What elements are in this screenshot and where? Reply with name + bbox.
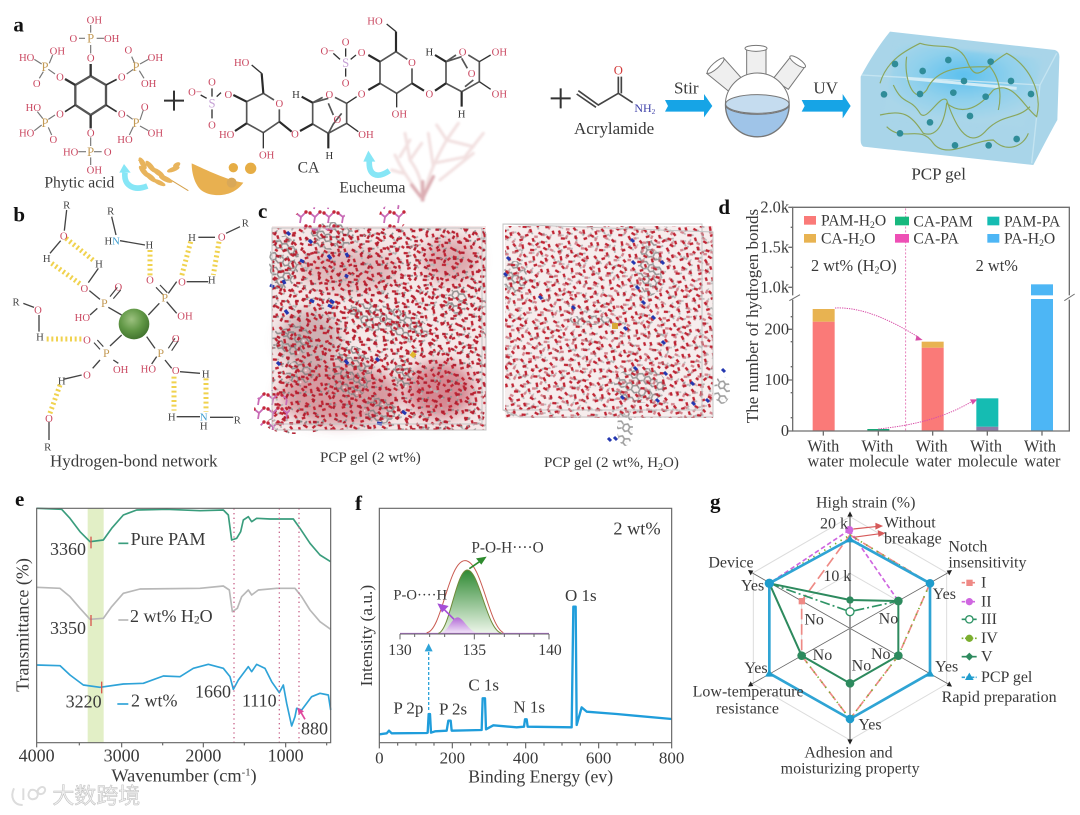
carrageenan (CA) structure: O — [342, 37, 350, 48]
carrageenan (CA) structure: O — [358, 90, 366, 101]
peak labels: 880 — [301, 718, 328, 738]
panel b: hydrogen-bond network — [12, 200, 250, 471]
arrow: molecule bonds increase — [878, 399, 977, 429]
axis arrowheads — [748, 511, 952, 745]
carrageenan (CA) structure: H — [425, 48, 433, 59]
caption: Hydrogen-bond network: Hydrogen-bond network — [50, 452, 218, 471]
atom labels: O — [45, 414, 53, 425]
peak labels — [393, 586, 597, 718]
axis labels and values: breakage — [884, 530, 942, 547]
series II — [769, 526, 898, 601]
axis labels and values — [693, 494, 1057, 777]
spectrum: Pure PAM — [37, 508, 331, 562]
legend: IV — [981, 630, 998, 647]
label: Stir: Stir — [674, 78, 699, 97]
carrageenan (CA) structure: H — [292, 90, 300, 101]
series label: 2 wt%: 2 wt% — [131, 691, 177, 711]
spectrum: 2 wt% — [37, 664, 331, 726]
phytic acid structure: HO — [26, 103, 41, 114]
label a: a — [13, 13, 24, 37]
gel particles — [881, 57, 1034, 149]
central metal ball — [119, 309, 149, 339]
snapshot: PCP gel 2 wt% — [254, 204, 486, 434]
axis labels and values: Rapid preparation — [942, 689, 1057, 706]
x axis tick labels: 0 — [375, 748, 384, 767]
x axis tick labels: 3000 — [104, 746, 140, 766]
inset: high resolution P 2p: 130 — [388, 642, 412, 659]
carrageenan (CA) structure: O — [208, 120, 216, 131]
atom labels: O — [83, 371, 91, 382]
phytic acid structure: P — [41, 60, 49, 74]
phytic acid structure: O — [104, 147, 112, 158]
peak labels — [50, 539, 328, 738]
peak labels: P 2s — [439, 699, 467, 718]
atom labels: H — [145, 241, 153, 252]
atom labels: R — [242, 218, 250, 229]
atom labels: HO — [75, 313, 90, 324]
atom labels: O — [178, 277, 186, 288]
phytic acid structure: O — [118, 110, 126, 121]
phytic acid structure: O — [141, 102, 149, 113]
x axis tick labels: With — [916, 437, 948, 456]
series label: 2 wt% H2O: O — [200, 606, 213, 626]
legend: CA-PAM — [913, 213, 973, 230]
phytic acid structure: OH — [87, 16, 102, 27]
x axis tick labels: water — [915, 452, 952, 471]
x axis tick labels — [375, 748, 684, 767]
radar grid — [750, 514, 950, 742]
x axis tick labels: 400 — [513, 748, 538, 767]
icon: soybeans — [192, 163, 256, 195]
phytic acid structure: O — [87, 54, 95, 65]
y axis tick labels: 200 — [764, 319, 789, 338]
axis labels and values: 10 k — [823, 568, 851, 585]
x axis tick labels — [19, 746, 304, 766]
carrageenan (CA) structure: S — [342, 56, 349, 70]
arrow: green component — [469, 557, 487, 569]
highlight band — [88, 508, 104, 743]
axis labels and values: No — [852, 658, 871, 675]
phytic acid structure: OH — [141, 79, 157, 90]
x axis tick labels: 600 — [586, 748, 611, 767]
watermark — [12, 783, 140, 808]
series III — [769, 583, 898, 616]
legend — [804, 212, 1061, 249]
atom labels: R — [107, 206, 115, 217]
phytic acid structure: O — [33, 79, 41, 90]
label: PCP gel: PCP gel — [911, 164, 966, 183]
carrageenan (CA) structure: O — [325, 90, 333, 101]
carrageenan (CA) structure: O — [468, 69, 476, 80]
carrageenan (CA) structure: H — [325, 151, 333, 162]
x axis tick labels: With — [807, 437, 839, 456]
label d: d — [718, 195, 730, 219]
panel d: hydrogen bond bar chart — [718, 195, 1075, 471]
caption: PCP gel (2 wt%, H2O): O) — [663, 455, 679, 471]
atom labels: H — [200, 421, 208, 432]
legend: V — [981, 648, 993, 665]
phytic acid structure: OH — [148, 53, 163, 64]
y axis tick labels: 0 — [781, 421, 789, 440]
legend: I — [981, 574, 986, 591]
carrageenan (CA) structure: O — [408, 58, 416, 69]
legend: CA-PA — [913, 230, 960, 247]
carrageenan (CA) structure: HO — [234, 58, 250, 69]
panel e: FTIR spectra — [12, 487, 331, 808]
label: 2 wt%: 2 wt% — [613, 518, 661, 538]
legend: PAM-H — [821, 212, 870, 229]
legend: CA-H — [821, 230, 859, 247]
legend: O — [864, 230, 875, 247]
caption: PCP gel (2 wt%, H2O): 2 — [658, 462, 663, 473]
x axis tick labels: 2000 — [185, 746, 221, 766]
x axis tick labels: 800 — [659, 748, 684, 767]
atom labels: O — [80, 284, 88, 295]
label: P-O-H···O: P-O-H····O — [471, 539, 544, 556]
axis labels and values: moisturizing property — [781, 760, 920, 777]
atom labels: P — [161, 291, 168, 305]
atom labels: OH — [113, 365, 129, 376]
atom labels: O — [172, 366, 180, 377]
carrageenan (CA) structure: H — [458, 109, 466, 120]
phytic acid structure: HO — [19, 53, 35, 64]
phytic acid structure: P — [132, 116, 140, 130]
spectrum: 2 wt% H2O — [37, 586, 331, 629]
acrylamide structure: NH — [634, 101, 652, 115]
carrageenan (CA) structure: O — [333, 115, 341, 126]
series IV — [769, 535, 930, 719]
peak labels: C 1s — [468, 676, 499, 695]
phytic acid structure: OH — [104, 34, 120, 45]
axis labels and values: Yes — [933, 586, 956, 603]
x axis tick labels: 200 — [440, 748, 465, 767]
legend: PCP gel — [981, 669, 1033, 686]
phytic acid structure: HO — [117, 135, 133, 146]
axis labels and values: Yes — [935, 658, 958, 675]
peak labels: 3350 — [50, 618, 86, 638]
phytic acid structure: O — [49, 135, 57, 146]
peak labels: 3220 — [66, 692, 102, 712]
label: Acrylamide: Acrylamide — [574, 119, 654, 138]
icon: eucheuma seaweed — [392, 123, 483, 200]
peak tick marks — [91, 537, 102, 693]
label e: e — [15, 487, 24, 511]
phytic acid structure: O — [124, 46, 132, 57]
panel c: molecular dynamics snapshots — [254, 199, 730, 473]
series label: 2 wt% H2O — [118, 606, 213, 626]
phytic acid structure: OH — [50, 46, 65, 57]
phytic acid structure: P — [87, 32, 94, 46]
y axis title: The number of hydrogen bonds — [743, 209, 762, 423]
legend: PA-H — [1004, 230, 1039, 247]
legend: O — [1044, 230, 1055, 247]
atom labels: N — [200, 412, 208, 423]
atom labels: O — [218, 232, 226, 243]
XPS survey curve — [379, 607, 672, 734]
series label: Pure PAM: Pure PAM — [131, 529, 205, 549]
carrageenan (CA) structure: HO — [367, 16, 383, 27]
axis labels and values: Yes — [858, 716, 882, 733]
carrageenan (CA) structure: O — [425, 89, 433, 100]
atom labels: P — [157, 346, 164, 360]
carrageenan (CA) structure: OH — [392, 109, 407, 120]
phytic acid structure: O — [118, 72, 126, 83]
x axis tick labels: water — [808, 452, 844, 471]
peak labels: O 1s — [565, 586, 597, 605]
carrageenan (CA) structure: O — [275, 99, 283, 110]
legend: O — [875, 212, 886, 229]
snapshot: PCP gel 2 wt% H2O — [503, 224, 730, 446]
panel a: reaction scheme left part — [13, 13, 507, 200]
covalent bonds — [23, 210, 240, 440]
x axis title: Binding Energy (ev) — [468, 767, 613, 787]
label b: b — [13, 203, 25, 227]
axis labels and values: resistance — [716, 700, 779, 717]
atom labels: O — [146, 276, 154, 287]
atom labels: O — [60, 231, 68, 242]
label: Eucheuma: Eucheuma — [339, 179, 405, 196]
arrow: purple component — [437, 603, 454, 619]
phytic acid structure — [19, 16, 163, 177]
arrow: carrageenan source — [363, 151, 389, 175]
inset: high resolution P 2p: 135 — [463, 642, 486, 659]
arrow: P 2p zoom — [425, 643, 433, 710]
x axis tick labels: With — [861, 437, 893, 456]
y axis title: Transmittance (%) — [13, 558, 34, 692]
acrylamide structure: 2 — [652, 107, 656, 116]
atom labels: R — [234, 416, 242, 427]
x axis tick labels: water — [1024, 452, 1061, 471]
carrageenan (CA) structure: O — [459, 48, 467, 59]
panel f: XPS spectrum — [355, 491, 684, 787]
y axis tick labels: 1.5k — [760, 237, 790, 256]
panel g: radar chart — [693, 489, 1057, 777]
phytic acid structure: P — [132, 60, 140, 74]
arrows: without breakage — [853, 524, 884, 537]
carrageenan (CA) structure — [188, 16, 507, 162]
series V — [769, 583, 903, 688]
phytic acid structure: O — [56, 110, 64, 121]
atom labels: H — [188, 233, 196, 244]
watermark: 大数跨境 — [52, 783, 140, 808]
atom labels: H — [202, 370, 210, 381]
label: Phytic acid: Phytic acid — [44, 174, 115, 191]
atom labels: R — [63, 200, 71, 211]
caption: PCP gel (2 wt%): PCP gel (2 wt%) — [320, 450, 421, 466]
atom labels: H — [168, 412, 176, 423]
x axis tick labels: With — [1024, 437, 1056, 456]
x axis title: ) — [251, 766, 257, 787]
x axis tick labels — [807, 437, 1061, 471]
atom labels: H — [104, 236, 112, 247]
axis labels and values: High strain (%) — [816, 494, 915, 511]
axis labels and values: 20 k — [820, 515, 848, 532]
atom labels: R — [12, 298, 20, 309]
illustration: PCP gel block — [861, 32, 1059, 165]
atom labels: O — [83, 336, 91, 347]
legend: III — [981, 611, 997, 628]
peak labels: 1660 — [195, 681, 231, 701]
legend: II — [981, 593, 992, 610]
axis labels and values: Yes — [741, 578, 764, 595]
plus sign — [164, 91, 184, 111]
label g: g — [710, 489, 721, 513]
axis labels and values: Low-temperature — [693, 684, 804, 701]
phytic acid structure: O — [87, 128, 95, 139]
peak labels: 1110 — [242, 691, 277, 711]
bars — [813, 284, 1053, 431]
atom labels: R — [44, 442, 52, 453]
atom labels: OH — [177, 312, 193, 323]
axis labels and values: No — [813, 647, 832, 664]
axis labels and values: No — [871, 646, 891, 663]
atom labels: H — [208, 276, 216, 287]
arrow: 880 peak — [297, 707, 305, 719]
carrageenan (CA) structure: HO — [219, 130, 235, 141]
x axis tick labels: molecule — [849, 452, 909, 471]
carrageenan (CA) structure: O — [342, 78, 350, 89]
y axis tick labels: 100 — [764, 370, 789, 389]
x axis title: Wavenumber (cm — [111, 766, 242, 786]
arrow: UV — [802, 94, 851, 118]
carrageenan (CA) structure: O− — [188, 87, 202, 98]
plot frame and ticks — [37, 508, 331, 747]
series I — [799, 535, 930, 719]
phytic acid structure: OH — [148, 128, 163, 139]
group label: 2 wt% (H2O): O) — [879, 256, 897, 275]
carrageenan (CA) structure: S — [208, 97, 216, 111]
atom labels: H — [95, 260, 103, 271]
axis labels and values: No — [804, 612, 824, 629]
icon: wheat — [137, 156, 188, 191]
label f: f — [355, 491, 363, 515]
legend — [962, 574, 1033, 686]
carrageenan (CA) structure: O — [208, 78, 216, 89]
carrageenan (CA) structure: OH — [492, 48, 507, 59]
axes — [788, 207, 1075, 436]
inset: high resolution P 2p — [388, 561, 562, 659]
plus sign — [551, 88, 571, 108]
axis labels and values: Notch — [948, 538, 987, 555]
axis labels and values: Adhesion and — [804, 744, 893, 761]
divider — [904, 208, 907, 431]
x axis title: -1 — [242, 768, 251, 779]
label: CA: CA — [298, 159, 320, 176]
hydrogen bonds (yellow) — [47, 238, 219, 415]
label: UV: UV — [813, 78, 839, 97]
carrageenan (CA) structure: O — [291, 129, 299, 140]
atom labels: P — [103, 346, 110, 360]
arrow: water bonds decrease — [835, 308, 923, 341]
series label: 2 wt% H2O: 2 — [194, 614, 200, 626]
legend: 2 — [870, 220, 875, 231]
plot frame and ticks — [379, 508, 672, 748]
group label: 2 wt%: 2 wt% — [976, 256, 1018, 275]
peak labels: 3360 — [50, 539, 86, 559]
inset: high resolution P 2p: 140 — [538, 642, 562, 659]
axis labels and values: Device — [708, 555, 754, 572]
peak reference lines — [234, 508, 299, 743]
peak labels: N 1s — [513, 698, 545, 717]
phytic acid structure: P — [41, 116, 49, 130]
arrow: stir — [665, 94, 712, 117]
acrylamide structure: O — [614, 64, 623, 78]
phytic acid structure: O — [56, 72, 64, 83]
atom labels — [12, 200, 250, 453]
phytic acid structure: HO — [63, 147, 79, 158]
atom labels: O — [172, 334, 180, 345]
axis labels and values: No — [879, 610, 898, 627]
x axis tick labels: molecule — [958, 452, 1018, 471]
y axis tick labels: 1.0k — [760, 277, 790, 296]
legend: PAM-PA — [1004, 213, 1061, 230]
panel a: reaction scheme right part — [551, 32, 1059, 183]
y axis tick labels — [760, 197, 790, 440]
axis labels and values: Yes — [744, 660, 768, 677]
arrow: phytic acid source — [119, 164, 147, 188]
phytic acid structure: P — [87, 145, 94, 159]
group label: 2 wt% (H2O): 2 wt% (H — [811, 256, 874, 275]
carrageenan (CA) structure: O — [224, 90, 232, 101]
y axis title: Intensity (a.u.) — [357, 585, 376, 686]
caption: PCP gel (2 wt%, H2O): PCP gel (2 wt%, H — [544, 455, 658, 471]
series label: 2 wt% H2O: 2 wt% H — [130, 606, 194, 626]
label: P-O···H: P-O····H — [393, 587, 447, 603]
group label: 2 wt% (H2O): 2 — [874, 266, 879, 277]
acrylamide structure — [577, 64, 656, 116]
atom labels: H — [58, 377, 66, 388]
axis labels and values: insensitivity — [948, 554, 1026, 571]
peak labels: P 2p — [393, 698, 423, 717]
y axis tick labels: 2.0k — [760, 197, 790, 216]
polymer strands — [880, 43, 1038, 150]
atom labels: N — [112, 236, 120, 247]
axis labels and values: Without — [884, 514, 936, 531]
atom labels: H — [43, 254, 51, 265]
legend: 2 — [1039, 238, 1044, 249]
carrageenan (CA) structure: O — [358, 48, 366, 59]
x axis tick labels: With — [970, 437, 1002, 456]
atom labels: O — [114, 282, 122, 293]
atom labels: HO — [141, 365, 156, 376]
carrageenan (CA) structure: OH — [492, 89, 507, 100]
carrageenan (CA) structure: OH — [358, 130, 374, 141]
series PCP gel — [765, 535, 934, 723]
x axis tick labels: 1000 — [268, 746, 304, 766]
atom labels: H — [36, 332, 44, 343]
carrageenan (CA) structure: OH — [259, 151, 275, 162]
carrageenan (CA) structure: O− — [320, 46, 334, 57]
x axis tick labels: 4000 — [19, 746, 55, 766]
atom labels: O — [34, 305, 42, 316]
phytic acid structure: OH — [87, 166, 102, 177]
legend: 2 — [859, 238, 864, 249]
phytic acid structure: O — [69, 34, 77, 45]
atom labels: P — [101, 296, 108, 310]
label c: c — [258, 199, 267, 223]
phytic acid structure: HO — [19, 128, 35, 139]
icon: three-neck flask — [705, 45, 807, 137]
